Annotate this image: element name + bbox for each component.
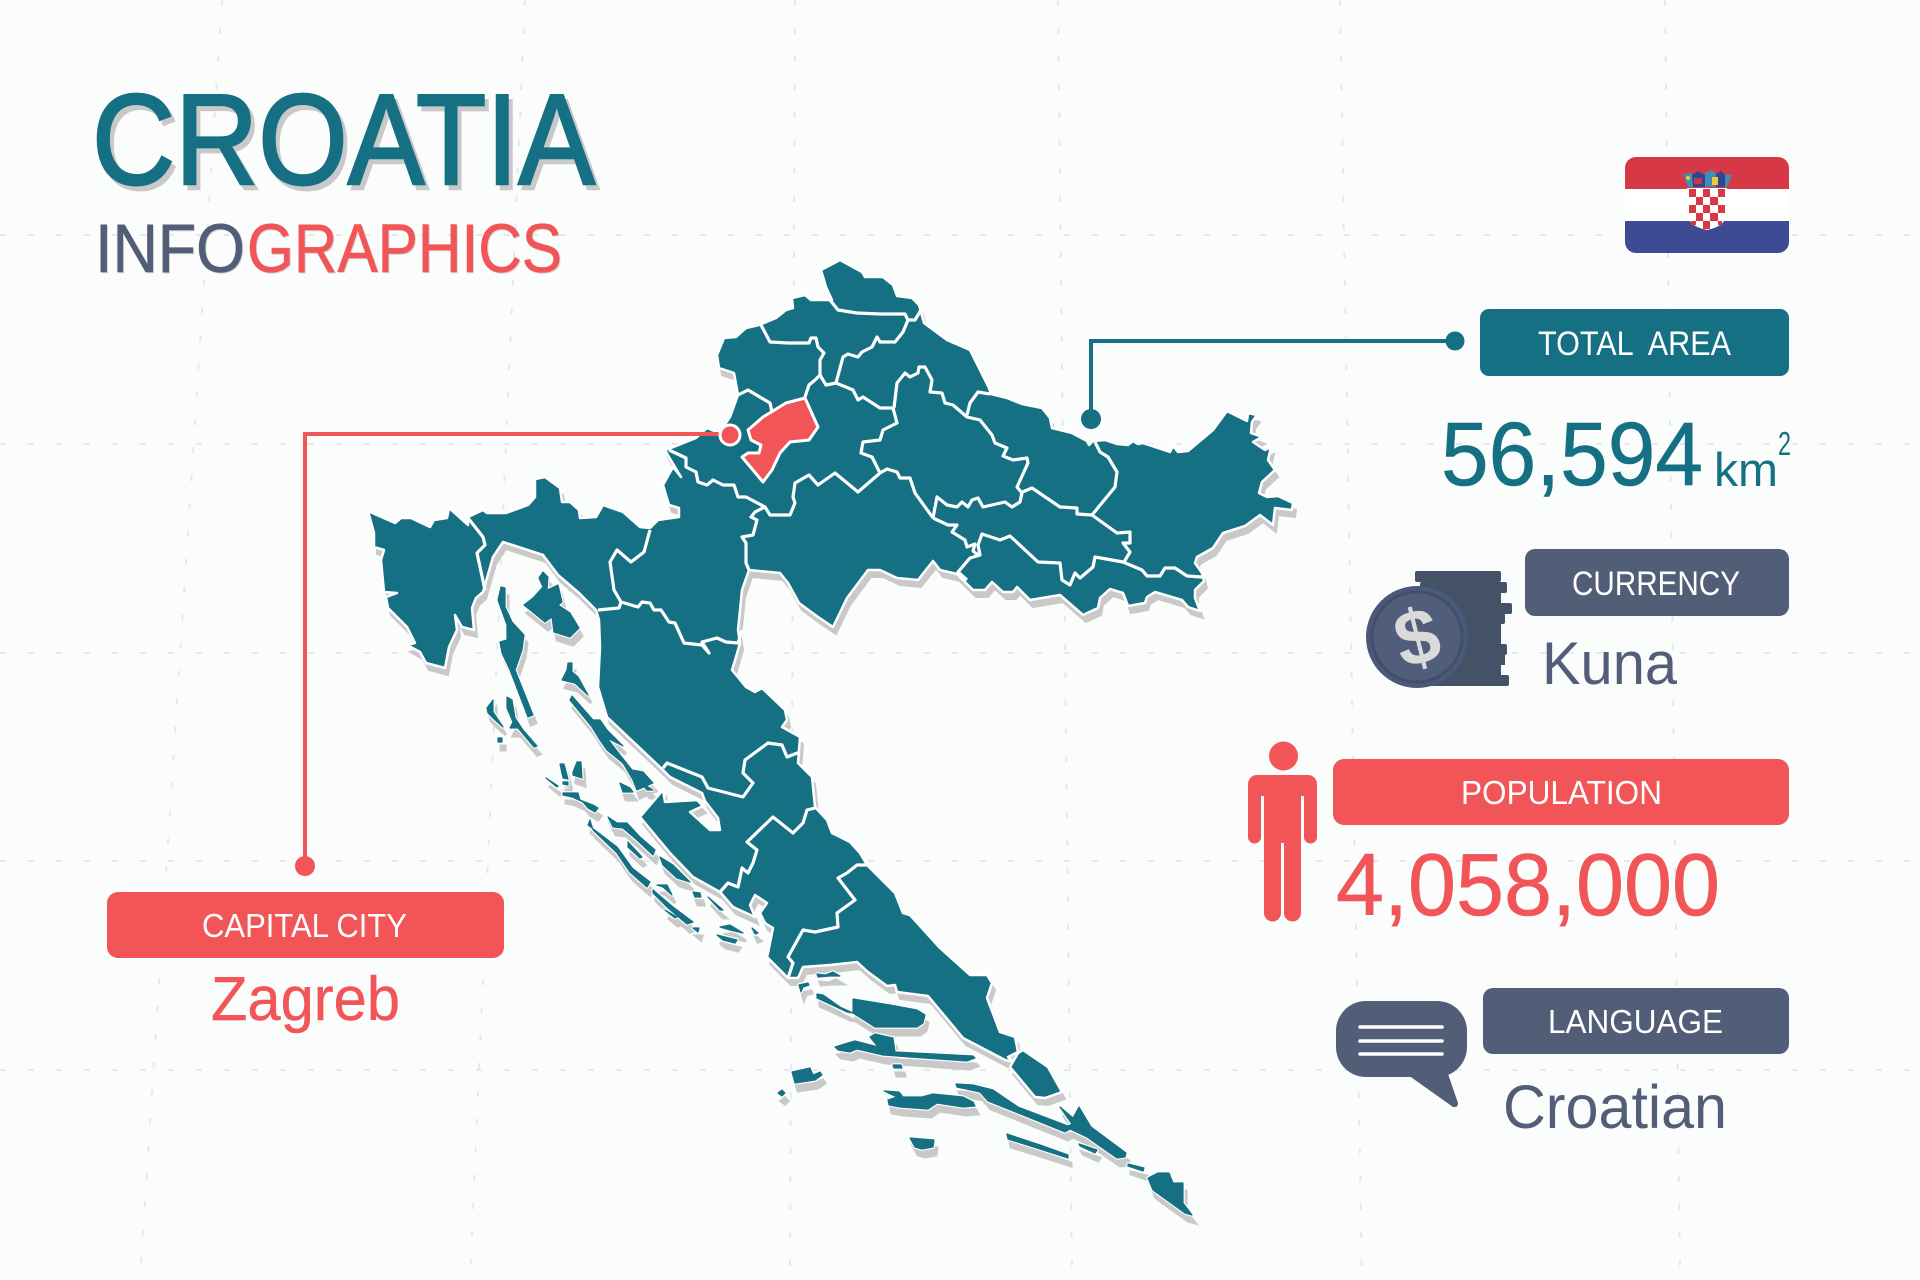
subtitle: INFOGRAPHICS: GRAPHICS [247, 210, 562, 287]
panel: capital city: Zagreb [211, 965, 400, 1034]
map of Croatia [368, 260, 1296, 1223]
panel: population: 4,058,000 [1336, 835, 1720, 934]
panel: capital city: CAPITAL CITY [202, 907, 407, 944]
panel: total area: 56,594 [1441, 405, 1703, 505]
icon: person [1248, 742, 1317, 922]
panel: language: LANGUAGE [1548, 1003, 1723, 1040]
panel: language: Croatian [1503, 1073, 1727, 1141]
panel: language [1483, 988, 1789, 1141]
panel: currency: CURRENCY [1572, 565, 1740, 603]
panel: total area: TOTAL AREA [1538, 325, 1731, 363]
highlighted region: Zagreb [742, 398, 818, 482]
subtitle: INFOGRAPHICS: INFO [95, 210, 245, 287]
map land masses [368, 260, 1293, 1098]
panel: total area [1441, 309, 1791, 505]
panel: currency: Kuna [1542, 630, 1678, 697]
panel: total area: 2 [1778, 425, 1791, 462]
panel: total area: km [1714, 443, 1778, 496]
icon: speech bubble [1336, 1001, 1467, 1107]
panel: capital city [107, 892, 504, 1034]
subtitle: INFOGRAPHICS [95, 210, 562, 287]
title: CROATIA: CROATIA [92, 68, 595, 212]
icon: coin stack [1366, 571, 1512, 688]
icon: dollar glyph: $ [1385, 589, 1449, 685]
total area connector line [1081, 332, 1464, 429]
county borders [468, 300, 1202, 978]
panel: population: POPULATION [1461, 774, 1662, 811]
panel: population [1333, 759, 1789, 934]
capital city connector line [295, 425, 740, 876]
panel: currency [1525, 549, 1789, 697]
icon: Croatian flag [1625, 157, 1789, 253]
